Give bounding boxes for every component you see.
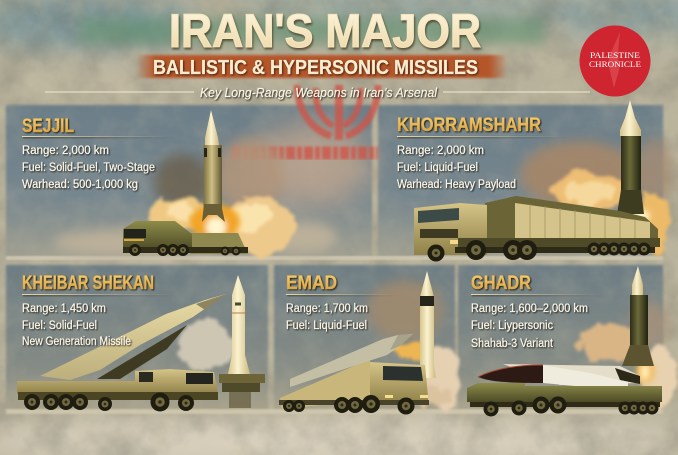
smoke: emad [367, 280, 462, 410]
text: kheibar shekan specs: New Generation Missile [22, 336, 131, 348]
card: ghadr [467, 266, 677, 416]
smoke: ghadr [580, 301, 677, 405]
text: ghadr specs: Range: 1,600–2,000 km [471, 303, 588, 315]
logo: Palestine Chronicle [580, 26, 650, 96]
text: emad specs: Range: 1,700 km [286, 303, 368, 315]
text: emad specs [286, 273, 396, 332]
panel: ghadr backdrop [458, 265, 663, 411]
text: kheibar shekan specs: Fuel: Solid-Fuel [22, 320, 97, 332]
ground strips [6, 256, 663, 414]
flag: green band and script [80, 18, 590, 53]
rocket: ghadr [622, 266, 654, 366]
text: khorramshahr specs: Range: 2,000 km [397, 145, 484, 157]
smoke: kheibar shekan clouds [178, 319, 238, 371]
text: sejjil specs: SEJJIL [22, 116, 74, 137]
smoke: sejjil [52, 137, 337, 256]
logo: Palestine Chronicle: CHRONICLE [589, 60, 641, 69]
smoke: khorramshahr [520, 138, 673, 254]
text: ghadr specs [471, 273, 601, 350]
truck: sejjil launcher [123, 221, 248, 256]
warm haze behind emblem [248, 123, 372, 207]
text: sejjil specs [22, 116, 172, 191]
card: khorramshahr [397, 100, 673, 262]
text: ghadr specs: GHADR [471, 273, 531, 294]
text: emad specs: EMAD [286, 273, 337, 294]
title: IRAN'S MAJOR [169, 4, 481, 57]
card: kheibar shekan [17, 273, 265, 412]
text: khorramshahr specs: Fuel: Liquid-Fuel [397, 162, 478, 174]
text: khorramshahr specs: Warhead: Heavy Payload [397, 179, 516, 191]
panel: kheibar shekan backdrop [6, 265, 268, 411]
flag emblem in red [232, 85, 378, 153]
text: ghadr specs: Fuel: Liypersonic [471, 320, 553, 332]
rocket: khorramshahr [617, 100, 644, 214]
card: sejjil [22, 110, 337, 256]
rocket: kheibar shekan standing missile [219, 275, 265, 408]
logo: Palestine Chronicle: PALESTINE [590, 51, 640, 60]
card: emad [279, 271, 462, 414]
text: sejjil specs: Warhead: 500-1,000 kg [22, 179, 138, 191]
truck: ghadr launcher [467, 364, 662, 416]
rocket: emad [420, 271, 436, 378]
panel texture [6, 105, 663, 411]
truck: khorramshahr launcher [414, 196, 660, 262]
tagline: Key Long-Range Weapons in Iran's Arsenal [200, 85, 438, 100]
rocket: sejjil [202, 110, 225, 222]
truck: emad launcher [279, 334, 429, 414]
text: ghadr specs: Shahab-3 Variant [471, 338, 554, 350]
panel: khorramshahr backdrop [378, 105, 663, 257]
subtitle banner: BALLISTIC & HYPERSONIC MISSILES [153, 56, 478, 79]
text: sejjil specs: Range: 2,000 km [22, 145, 109, 157]
panel: sejjil backdrop [6, 105, 372, 257]
text: kheibar shekan specs: Range: 1,450 km [22, 303, 106, 315]
panel: emad backdrop [274, 265, 455, 411]
text: khorramshahr specs [397, 115, 567, 191]
text: sejjil specs: Fuel: Solid-Fuel, Two-Stage [22, 162, 155, 174]
text: kheibar shekan specs [22, 273, 172, 348]
truck: kheibar shekan launcher [17, 294, 226, 412]
text: emad specs: Fuel: Liquid-Fuel [286, 320, 367, 332]
text: khorramshahr specs: KHORRAMSHAHR [397, 115, 541, 136]
text: kheibar shekan specs: KHEIBAR SHEKAN [22, 273, 154, 294]
